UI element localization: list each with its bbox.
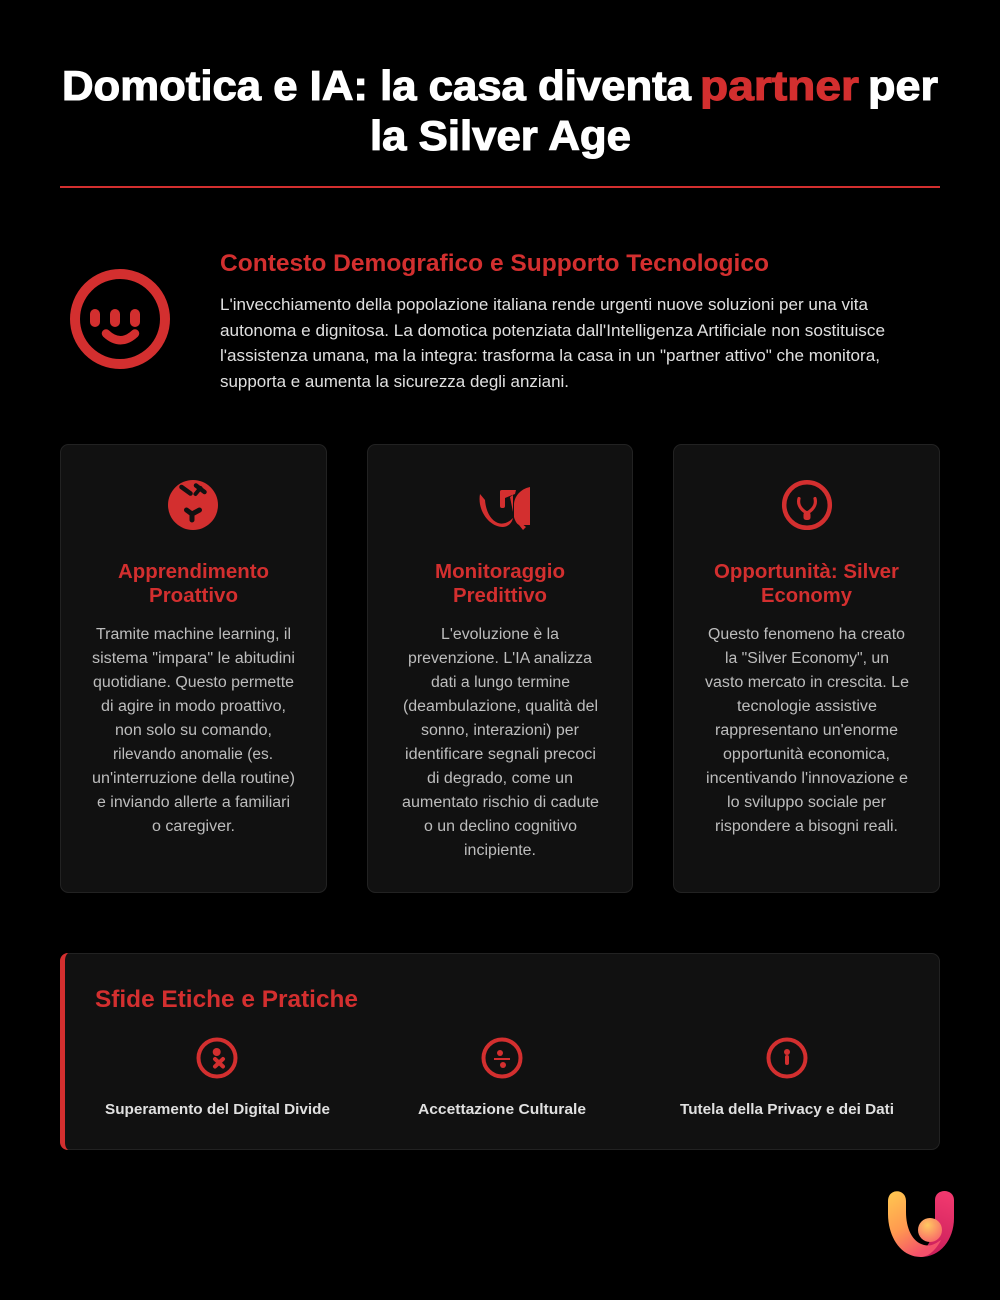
card text: prevenzione. L'IA analizza	[408, 650, 592, 667]
panel: apprendimento proattivo	[60, 444, 326, 892]
card text: sonno, interazioni) per	[421, 722, 579, 739]
card heading	[435, 561, 565, 607]
challenge label: Superamento del Digital Divide	[105, 1101, 330, 1118]
panel: monitoraggio predittivo	[368, 444, 632, 892]
card text: Tramite machine learning, il	[96, 626, 291, 643]
card heading: Proattivo	[149, 585, 238, 607]
card text	[705, 626, 909, 835]
card text: Questo fenomeno ha creato	[708, 626, 905, 643]
card text	[402, 626, 599, 859]
title: Domotica e IA: la casa diventa	[62, 62, 692, 109]
card text: e inviando allerte a familiari	[97, 794, 290, 811]
card text	[92, 626, 295, 835]
challenge: privacy	[680, 1040, 894, 1118]
card text: o caregiver.	[152, 818, 235, 835]
challenge label: Tutela della Privacy e dei Dati	[680, 1101, 894, 1118]
card text: rappresentano un'enorme	[715, 722, 898, 739]
icon: divide sign	[484, 1040, 520, 1076]
card text: incipiente.	[464, 842, 536, 859]
card text: lo sviluppo sociale per	[727, 794, 886, 811]
card text: quotidiane. Questo permette	[93, 674, 294, 691]
card text: (deambulazione, qualità del	[403, 698, 598, 715]
logo	[888, 1191, 954, 1257]
icon: smiling face	[75, 274, 165, 364]
section heading: Sfide Etiche e Pratiche	[95, 986, 358, 1013]
card text: vasto mercato in crescita. Le	[705, 674, 909, 691]
intro paragraph: autonoma e dignitosa. La domotica potenziata dall'Intelligenza Artificiale non sostituisce	[220, 322, 885, 340]
card text: sistema "impara" le abitudini	[92, 650, 295, 667]
card text: aumentato rischio di cadute	[402, 794, 599, 811]
card heading: Predittivo	[453, 585, 547, 607]
icon: tools and branch	[168, 480, 218, 530]
intro paragraph: L'invecchiamento della popolazione italiana rende urgenti nuove soluzioni per una vita	[220, 296, 869, 314]
card heading: Monitoraggio	[435, 561, 565, 583]
card text: rispondere a bisogni reali.	[715, 818, 898, 835]
card text: non solo su comando,	[115, 722, 272, 739]
card text: incentivando l'innovazione e	[706, 770, 908, 787]
intro paragraph: l'assistenza umana, ma la integra: trasforma la casa in un "partner attivo" che monitora,	[220, 347, 880, 365]
card text: dati a lungo termine	[431, 674, 570, 691]
card heading	[714, 561, 899, 607]
icon: monitoring arc and shield	[480, 487, 530, 530]
card heading: Apprendimento	[118, 561, 269, 583]
card text: opportunità economica,	[723, 746, 890, 763]
intro heading: Contesto Demografico e Supporto Tecnologico	[220, 250, 769, 277]
card heading: Opportunità: Silver	[714, 561, 899, 583]
card text: L'evoluzione è la	[441, 626, 559, 643]
challenge: cultural acceptance	[418, 1040, 586, 1118]
card text: tecnologie assistive	[737, 698, 877, 715]
icon: info sign	[768, 1040, 806, 1076]
card text: di degrado, come un	[427, 770, 573, 787]
card text: identificare segnali precoci	[405, 746, 596, 763]
card text: un'interruzione della routine)	[92, 770, 295, 787]
card text: la "Silver Economy", un	[725, 650, 889, 667]
icon: person with cross	[198, 1040, 236, 1076]
title	[62, 62, 938, 159]
card text: o un declino cognitivo	[424, 818, 577, 835]
icon: ring with fork	[784, 482, 830, 528]
title: partner	[700, 62, 859, 109]
card heading	[118, 561, 269, 607]
card heading: Economy	[761, 585, 853, 607]
panel: opportunita silver economy	[674, 444, 940, 892]
challenge label: Accettazione Culturale	[418, 1101, 586, 1118]
panel: sfide etiche e pratiche	[60, 953, 940, 1150]
intro paragraph	[220, 296, 885, 391]
title: la Silver Age	[370, 112, 631, 159]
card text: rilevando anomalie (es.	[113, 746, 273, 763]
card text: di agire in modo proattivo,	[101, 698, 286, 715]
challenge: digital divide	[105, 1040, 330, 1118]
intro paragraph: supporta e aumenta la sicurezza degli anziani.	[220, 373, 569, 391]
title: per	[868, 62, 938, 109]
intro text block	[220, 250, 885, 391]
